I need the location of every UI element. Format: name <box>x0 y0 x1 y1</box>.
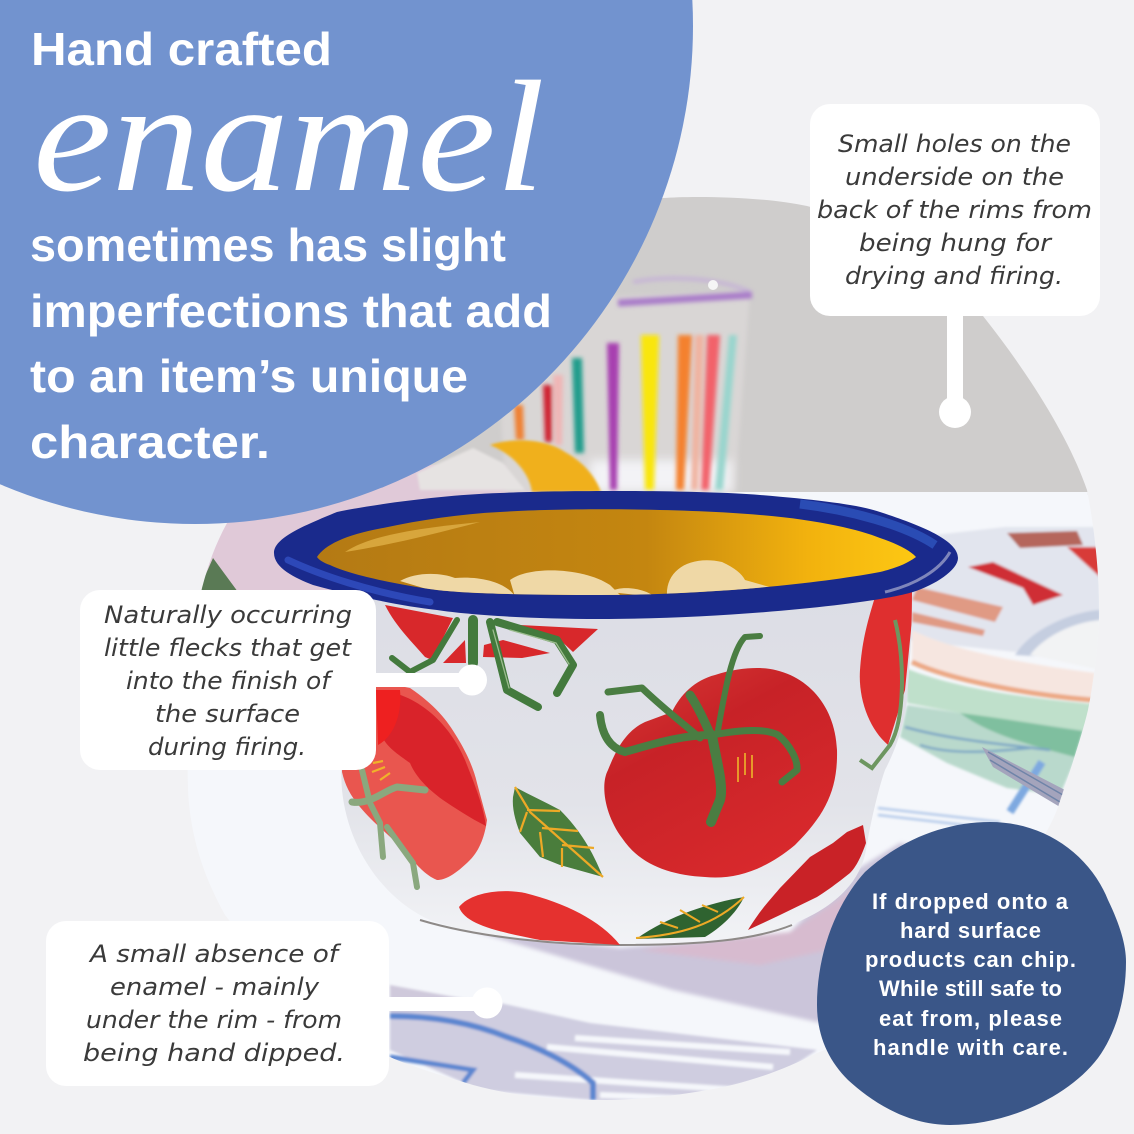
leaf: centre <box>513 787 603 877</box>
table shadow and blue lines <box>390 985 817 1105</box>
tomato: right <box>860 590 915 745</box>
striped glass <box>495 278 752 492</box>
heading: body text: imperfections that add <box>30 285 552 337</box>
lemon <box>490 440 601 492</box>
heading: enamel: enamel <box>33 49 545 225</box>
tomato: left <box>342 680 487 880</box>
callout: small holes <box>810 104 1100 428</box>
callout: chip warning blob: eat from, please <box>879 1006 1062 1031</box>
callout: flecks: the surface <box>155 700 300 728</box>
callout: absence of enamel: being hand dipped. <box>83 1039 345 1067</box>
dark green object <box>202 558 236 590</box>
callout: small holes: Small holes on the <box>838 130 1071 158</box>
callout: small holes: underside on the <box>845 163 1064 191</box>
callout: absence of enamel <box>46 921 502 1086</box>
callout: flecks: little flecks that get <box>104 634 353 662</box>
tomato: bottom right <box>748 825 866 930</box>
callout: flecks: into the finish of <box>126 667 334 695</box>
leaf: bottom <box>636 897 744 939</box>
callout: chip warning blob: If dropped onto a <box>872 889 1069 914</box>
tomato: top <box>385 605 598 663</box>
white dish behind <box>417 448 525 490</box>
striped cloth and plates <box>878 527 1100 828</box>
callout: chip warning blob: While still safe to <box>879 976 1062 1001</box>
bowl body <box>341 590 915 945</box>
lilac cloth <box>206 465 522 590</box>
callout: chip warning blob <box>817 822 1126 1125</box>
photo table <box>706 492 1088 495</box>
tomato: bottom <box>459 891 620 945</box>
fork <box>982 747 1065 807</box>
heading: body text: character. <box>30 416 270 468</box>
stem: right tomato <box>860 620 902 768</box>
photo: enamel bowl on table <box>180 190 1110 1112</box>
heading: body text <box>30 219 552 468</box>
callout: flecks <box>80 590 487 770</box>
heading: body text: to an item’s unique <box>30 350 468 402</box>
callout: flecks: during firing. <box>148 733 306 761</box>
heading: body text: sometimes has slight <box>30 219 506 271</box>
callout: small holes: being hung for <box>859 229 1053 257</box>
glass glint <box>708 280 718 290</box>
callout: absence of enamel: enamel - mainly <box>110 973 320 1001</box>
callout: absence of enamel: A small absence of <box>88 940 342 968</box>
callout: chip warning blob: hard surface <box>900 918 1041 943</box>
callout: flecks: Naturally occurring <box>104 601 352 629</box>
photo backdrop wall <box>430 197 1088 494</box>
heading: hand crafted: Hand crafted <box>31 23 332 75</box>
callout: small holes: back of the rims from <box>817 196 1092 224</box>
stem: top tomato <box>392 620 573 707</box>
bowl rim and interior <box>274 491 958 619</box>
callout: absence of enamel: under the rim - from <box>86 1006 342 1034</box>
shadow under bowl <box>481 842 908 1024</box>
stem: centre tomato <box>600 636 797 822</box>
headline panel <box>0 0 693 524</box>
callout: small holes: drying and firing. <box>845 262 1063 290</box>
tomato: large centre <box>604 668 837 878</box>
callout: chip warning blob: products can chip. <box>865 947 1076 972</box>
yellow flecks <box>738 753 752 782</box>
callout: chip warning blob: handle with care. <box>873 1035 1068 1060</box>
rim highlights <box>800 504 935 545</box>
crackers <box>345 522 769 595</box>
stem: left tomato <box>352 770 425 887</box>
